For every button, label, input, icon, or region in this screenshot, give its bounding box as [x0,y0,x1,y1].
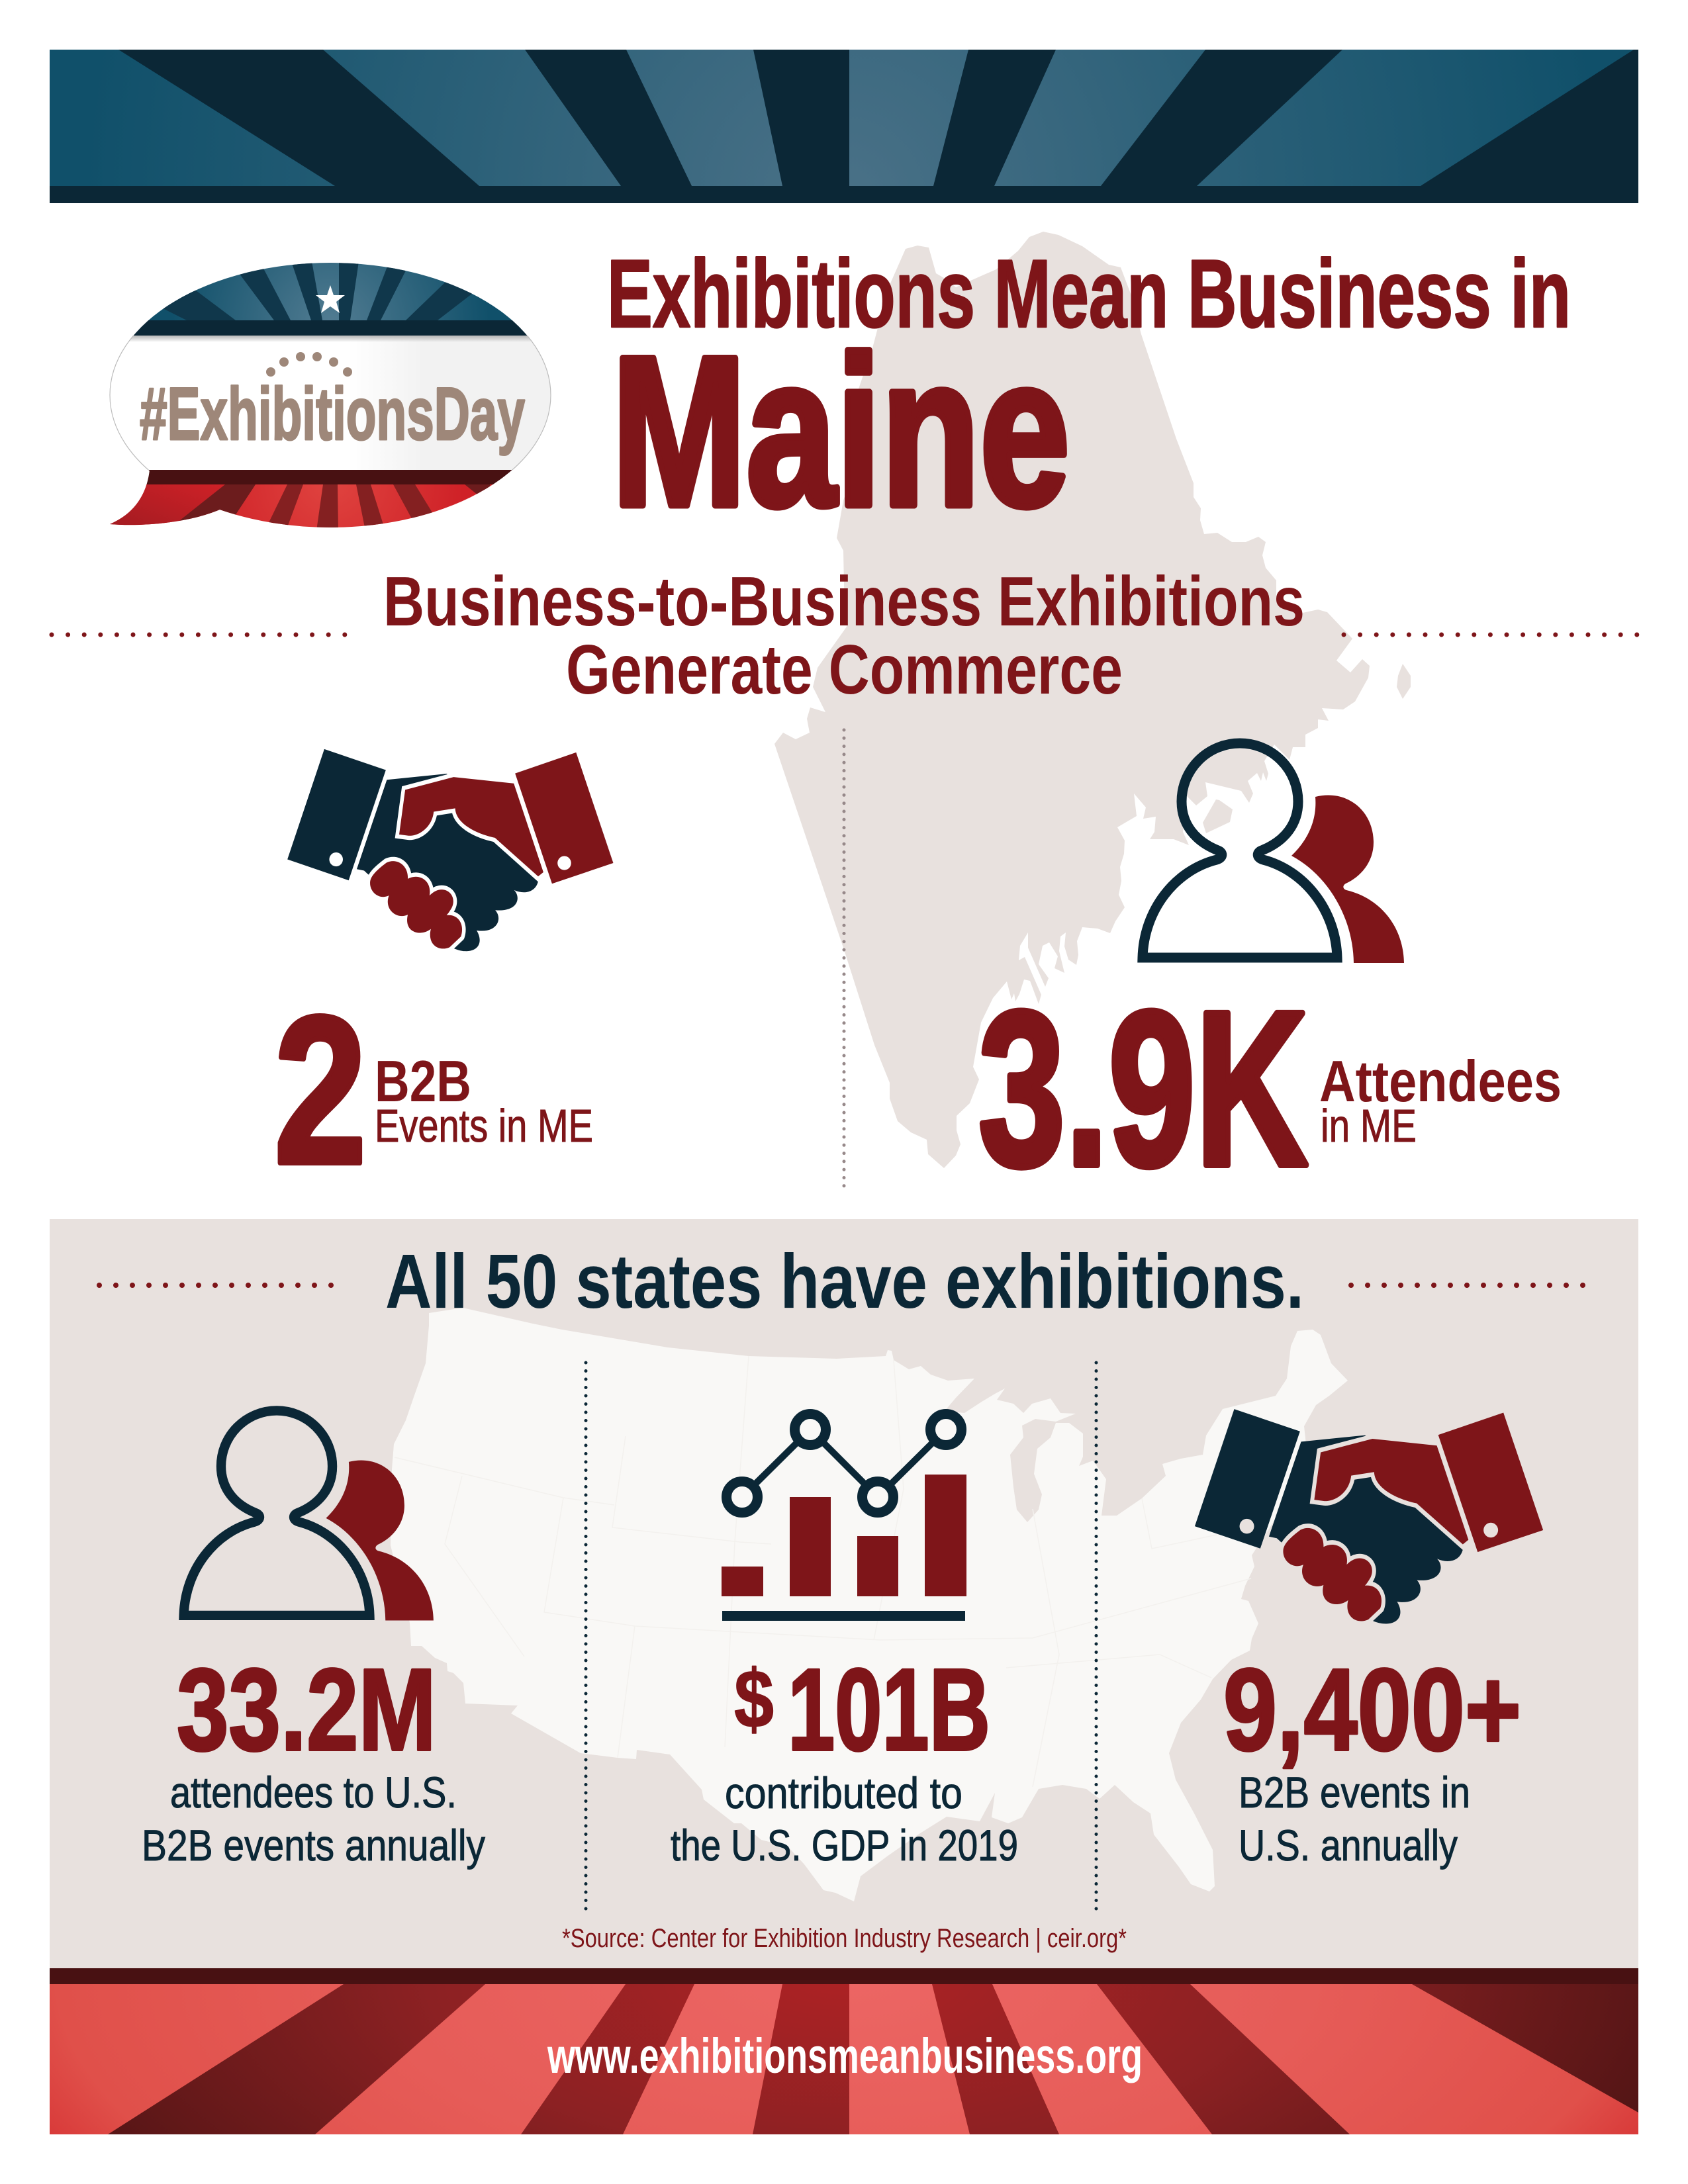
stat: 33.2M attendees: 33.2M [177,1645,436,1775]
heading: All 50 states have exhibitions.: All 50 states have exhibitions. [385,1238,1304,1324]
map: Maine silhouette background [774,232,1411,1168]
logo arch of dots [266,352,352,377]
logo hashtag text: #ExhibitionsDay [140,373,525,455]
stat: 33.2M attendees: attendees to U.S. [170,1768,457,1817]
icon: bar and line chart [722,1414,966,1621]
stat: $101B GDP: the U.S. GDP in 2019 [671,1821,1018,1870]
stat: 2 B2B events in ME: Events in ME [375,1100,593,1152]
icon: handshake (U.S. events) [1195,1409,1543,1623]
icon: handshake (Maine events) [287,749,613,951]
stat: 9,400+ events: B2B events in [1239,1768,1470,1817]
icon: attendees people (U.S.) [184,1410,434,1621]
icon: attendees people (Maine) [1143,743,1404,963]
map: United States silhouette [391,1308,1348,1901]
website URL: www.exhibitionsmeanbusiness.org [547,2028,1143,2083]
panel: all 50 states [50,1219,1638,1968]
stat: $101B GDP [671,1645,1018,1870]
stat: 3.9K attendees in ME: in ME [1321,1100,1417,1152]
stat: 9,400+ events [1223,1645,1521,1870]
subtitle: Business-to-Business Exhibitions Generate Commerce [383,563,1305,709]
subtitle: Business-to-Business Exhibitions Generate Commerce: Generate Commerce [566,631,1123,709]
stat: 33.2M attendees [142,1645,485,1870]
stat: 33.2M attendees: B2B events annually [142,1821,485,1870]
header banner with blue rays [50,50,1638,203]
stat: 3.9K attendees in ME: Attendees [1319,1048,1562,1114]
stat: 9,400+ events: U.S. annually [1239,1821,1458,1870]
source note: *Source: Center for Exhibition Industry Research | ceir.org* [562,1924,1127,1953]
stat: 9,400+ events: 9,400+ [1223,1645,1521,1775]
stat: $101B GDP: contributed to [725,1768,962,1817]
stat: $101B GDP: $ [734,1654,774,1745]
logo: #ExhibitionsDay speech bubble [106,261,556,531]
icon: white star [316,285,345,313]
stat: 2 B2B events in ME: 2 [274,973,367,1208]
stat: 3.9K attendees in ME: 3.9K [978,966,1308,1212]
stat: $101B GDP: 101B [788,1645,990,1775]
stat: 2 B2B events in ME [274,973,593,1208]
footer banner with red rays [50,1968,1638,2134]
stat: 2 B2B events in ME: B2B [375,1048,471,1114]
subtitle: Business-to-Business Exhibitions Generate Commerce: Business-to-Business Exhibitions [383,563,1305,641]
title: Maine: Maine [612,313,1070,551]
